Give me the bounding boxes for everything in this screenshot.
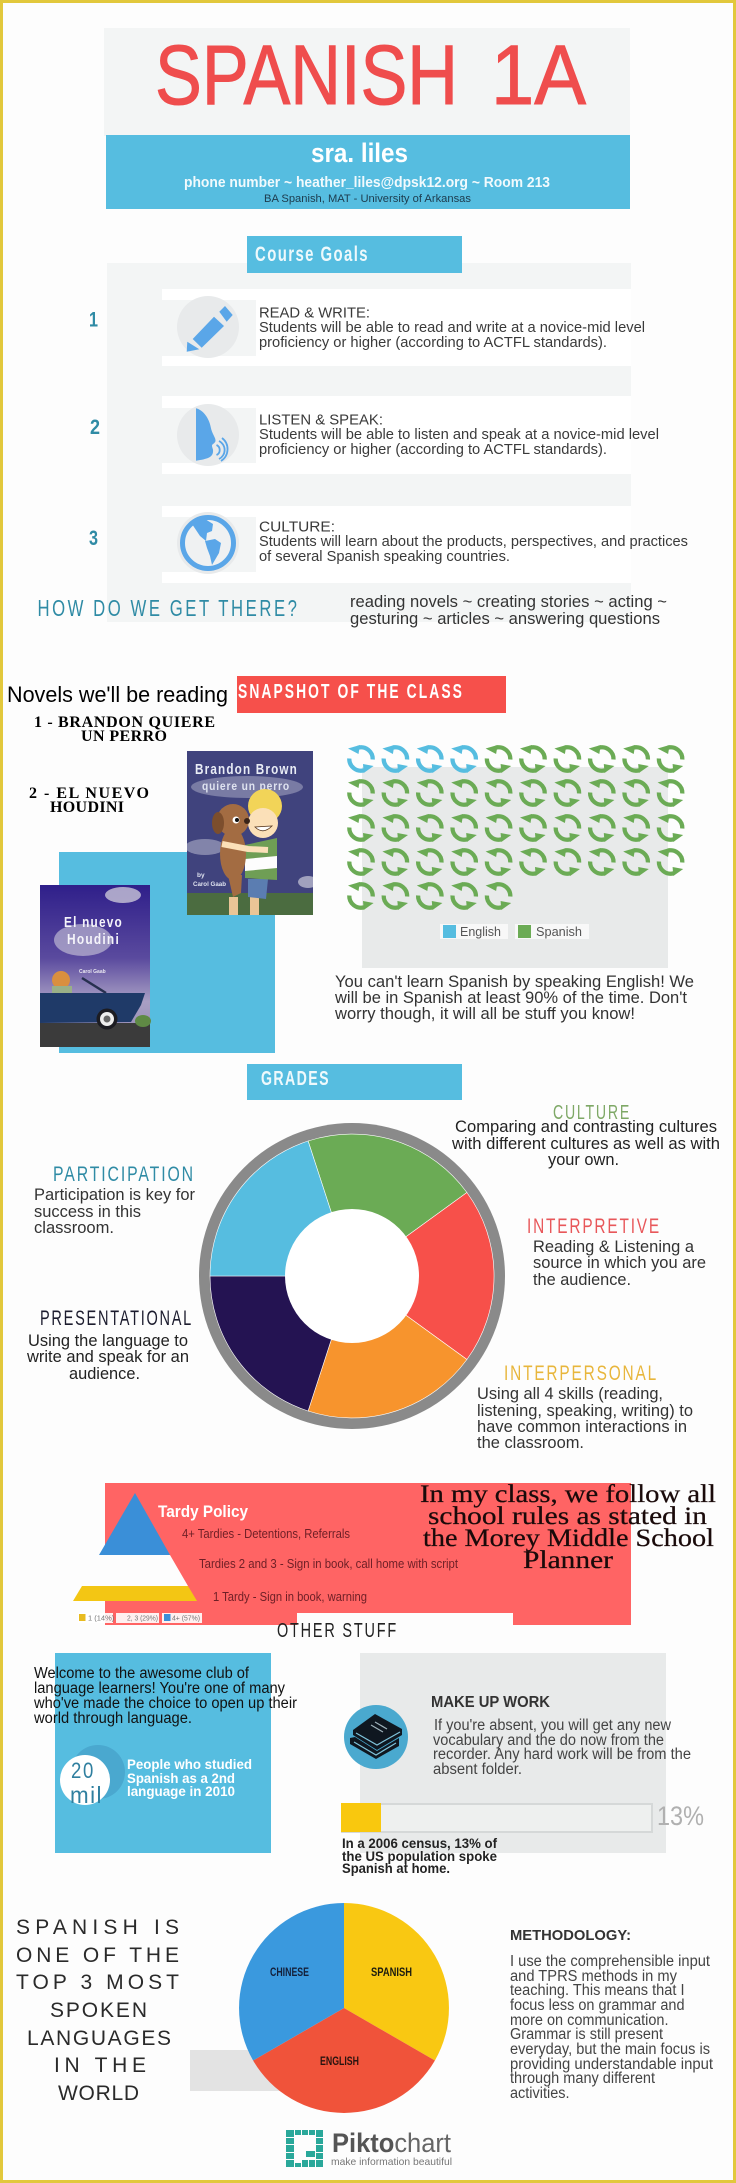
text: school rules: school rules as stated in	[428, 1503, 708, 1530]
text: presentational	[26, 1307, 193, 1383]
text: census	[342, 1836, 497, 1876]
text: methodology: activities.	[510, 2085, 570, 2102]
pyramid legend	[78, 1613, 202, 1623]
text: methodology: and TPRS methods in my	[510, 1968, 677, 1985]
text: welcome	[33, 1665, 297, 1727]
donut chart: grades	[199, 1123, 505, 1429]
text: participation: Participation is key for	[34, 1185, 195, 1204]
book cover: El nuevo Houdini	[40, 885, 151, 1047]
goal 3: culture: 3	[89, 527, 98, 550]
text: interpersonal: INTERPERSONAL	[504, 1362, 658, 1385]
goal 3: culture: Students will learn about the products, perspectives, and practices	[259, 534, 688, 550]
novel titles: UN PERRO	[81, 728, 167, 745]
text: school rules: In my class, we follow all	[420, 1481, 716, 1508]
text: census: In a 2006 census, 13% of	[342, 1836, 497, 1851]
goal 3: culture: CULTURE:	[259, 520, 335, 536]
text: interpretive	[527, 1215, 706, 1289]
pictogram: Spanish	[348, 745, 683, 910]
text: census: the US population spoke	[342, 1849, 497, 1864]
text: interpersonal: have common interactions in	[477, 1417, 687, 1436]
text: interpretive: the audience.	[533, 1270, 631, 1289]
text: school rules	[420, 1481, 716, 1574]
pictogram: English	[348, 745, 477, 773]
icon: logo grid	[286, 2130, 323, 2167]
text: welcome: world through language.	[33, 1710, 192, 1727]
panel: make up work: If you're absent, you will get any new	[434, 1717, 672, 1734]
panel: course goals	[89, 236, 688, 622]
goal 1: read and write: proficiency or higher (according to ACTFL standards).	[259, 335, 607, 351]
panel: tardy policy: Tardies 2 and 3 - Sign in book, call home with script	[199, 1557, 458, 1571]
goal 3: culture	[89, 506, 688, 583]
progress bar: 13%	[341, 1801, 704, 1832]
text: interpersonal	[477, 1362, 693, 1452]
goal 2: listen and speak: LISTEN & SPEAK:	[259, 412, 383, 428]
how do we get there: reading novels ~ creating stories ~ acting ~	[350, 593, 667, 611]
legend	[440, 924, 589, 939]
panel: make up work: recorder. Any hard work will be from the	[433, 1746, 691, 1763]
text: census: Spanish at home.	[342, 1861, 450, 1876]
panel: make up work	[341, 1653, 704, 1876]
teacher info band: BA Spanish, MAT - University of Arkansas	[264, 193, 471, 205]
heading: grades: GRADES	[261, 1068, 330, 1090]
title: SPANISH	[155, 28, 458, 122]
pyramid legend: 2, 3 (29%)	[127, 1614, 158, 1622]
pyramid legend: 1 (14%)	[88, 1614, 115, 1622]
text: culture	[451, 1102, 720, 1169]
title: 1A	[491, 28, 586, 122]
paragraph: speaking Spanish: worry though, it will all be stuff you know!	[334, 1004, 635, 1023]
text: welcome: language learners! You're one of many	[34, 1680, 285, 1697]
text: presentational: write and speak for an	[26, 1347, 189, 1366]
text: welcome: who've made the choice to open up their	[33, 1695, 297, 1712]
stat: 20 mil	[60, 1745, 125, 1808]
text: methodology: METHODOLOGY:	[510, 1927, 631, 1944]
text: top 3 most spoken languages: IN THE	[54, 2054, 146, 2077]
panel: tardy policy: Tardy Policy	[158, 1502, 248, 1521]
heading: grades	[247, 1064, 462, 1100]
text: interpretive: INTERPRETIVE	[527, 1215, 661, 1238]
goal 1: read and write: 1	[89, 308, 98, 332]
book cover: Brandon Brown quiere un perro: quiere un perro	[202, 779, 290, 793]
text: top 3 most spoken languages: TOP 3 MOST	[16, 1971, 179, 1994]
paragraph: speaking Spanish	[334, 972, 694, 1023]
legend: English	[460, 924, 501, 939]
text: top 3 most spoken languages: SPANISH IS	[16, 1916, 179, 1939]
teacher info band: sra. liles	[311, 138, 408, 168]
text: top 3 most spoken languages: ONE OF THE	[16, 1944, 179, 1967]
text: interpretive: source in which you are	[533, 1253, 706, 1272]
book cover: El nuevo Houdini: Houdini	[67, 932, 120, 948]
text: presentational: Using the language to	[28, 1331, 188, 1350]
text: top 3 most spoken languages: WORLD	[58, 2082, 139, 2105]
text: culture: your own.	[548, 1150, 619, 1169]
goal 2: listen and speak	[90, 396, 659, 474]
icon: pencil	[177, 296, 239, 358]
Piktochart logo	[286, 2128, 452, 2168]
book cover: Brandon Brown quiere un perro: by	[197, 872, 205, 879]
text: methodology: teaching. This means that I	[510, 1982, 684, 1999]
text: interpretive: Reading & Listening a	[533, 1237, 695, 1256]
novel titles	[29, 714, 215, 816]
pyramid chart	[60, 1493, 197, 1601]
heading: snapshot of the class: SNAPSHOT OF THE CLASS	[238, 681, 464, 703]
text: participation: success in this	[34, 1202, 141, 1221]
heading: course goals	[247, 236, 462, 273]
text: participation: classroom.	[34, 1218, 114, 1237]
teacher info band	[106, 135, 630, 209]
panel: make up work: MAKE UP WORK	[431, 1694, 551, 1711]
panel: language learners: language in 2010	[127, 1783, 235, 1799]
text: presentational: PRESENTATIONAL	[40, 1307, 193, 1330]
goal 2: listen and speak: proficiency or higher (according to ACTFL standards).	[259, 442, 607, 458]
panel: language learners: People who studied	[127, 1756, 252, 1772]
text: welcome: Welcome to the awesome club of	[34, 1665, 250, 1682]
goal 1: read and write	[89, 289, 645, 366]
book cover: El nuevo Houdini: Carol Gaab	[79, 969, 106, 975]
heading: course goals: Course Goals	[255, 243, 369, 266]
goal 2: listen and speak: 2	[90, 416, 100, 439]
heading: snapshot of the class	[237, 676, 506, 713]
text: top 3 most spoken languages: LANGUAGES	[27, 2027, 171, 2050]
text: top 3 most spoken languages	[16, 1916, 179, 2105]
novels heading: Novels we'll be reading	[7, 682, 228, 707]
book cover: El nuevo Houdini: El nuevo	[64, 915, 123, 931]
icon: speaking head	[177, 404, 239, 466]
text: methodology: more on communication.	[510, 2012, 668, 2029]
paragraph: speaking Spanish: will be in Spanish at least 90% of the time. Don't	[334, 988, 687, 1007]
icon: globe	[177, 512, 239, 574]
icon: books	[344, 1705, 408, 1769]
Piktochart logo: make information beautiful	[331, 2156, 452, 2168]
text: presentational: audience.	[69, 1364, 140, 1383]
panel: language learners: Spanish as a 2nd	[127, 1770, 235, 1786]
text: participation	[34, 1163, 195, 1237]
pie chart: languages	[239, 1903, 449, 2113]
text: top 3 most spoken languages: SPOKEN	[50, 1999, 147, 2022]
text: methodology: I use the comprehensible input	[510, 1953, 711, 1970]
text: culture: Comparing and contrasting cultures	[455, 1117, 717, 1136]
how do we get there: gesturing ~ articles ~ answering questions	[350, 610, 660, 628]
text: participation: PARTICIPATION	[53, 1163, 195, 1186]
text: methodology: providing understandable input	[510, 2056, 714, 2073]
text: methodology: focus less on grammar and	[510, 1997, 684, 2014]
stat: 20 mil: 20	[71, 1758, 95, 1783]
heading: other stuff: OTHER STUFF	[277, 1620, 398, 1642]
novel titles: 1 - BRANDON QUIERE	[34, 714, 215, 731]
text: culture: with different cultures as well as with	[451, 1134, 720, 1153]
paragraph: speaking Spanish: You can't learn Spanish by speaking English! We	[335, 972, 694, 991]
book cover: Brandon Brown quiere un perro	[185, 751, 318, 915]
panel: tardy policy: 4+ Tardies - Detentions, Referrals	[182, 1527, 350, 1541]
how do we get there	[38, 593, 667, 628]
text: methodology: everyday, but the main focus is	[510, 2041, 710, 2058]
pyramid legend: 4+ (57%)	[172, 1614, 200, 1622]
book cover: Brandon Brown quiere un perro: Brandon Brown	[195, 761, 298, 778]
panel: make up work: vocabulary and the do now from the	[433, 1732, 664, 1749]
pie chart: languages: CHINESE	[270, 1965, 309, 1979]
text: methodology	[510, 1927, 714, 2102]
header	[104, 28, 630, 209]
text: school rules: the Morey Middle School	[423, 1525, 714, 1552]
goal 1: read and write: Students will be able to read and write at a novice-mid level	[259, 320, 645, 336]
panel: pictogram chart	[348, 745, 683, 968]
panel: tardy policy: 1 Tardy - Sign in book, warning	[213, 1590, 367, 1604]
goal 3: culture: of several Spanish speaking countries.	[259, 549, 510, 565]
stat: 20 mil: mil	[70, 1782, 103, 1808]
text: interpersonal: listening, speaking, writing) to	[477, 1401, 693, 1420]
Piktochart logo: Piktochart	[332, 2128, 451, 2158]
text: methodology: Grammar is still present	[510, 2026, 664, 2043]
text: interpersonal: the classroom.	[477, 1433, 584, 1452]
text: methodology: through many different	[510, 2070, 656, 2087]
gray bar behind pie	[190, 2050, 282, 2091]
goal 2: listen and speak: Students will be able to listen and speak at a novice-mid level	[259, 427, 659, 443]
text: school rules: Planner	[523, 1547, 614, 1574]
pie chart: languages: SPANISH	[371, 1965, 412, 1979]
panel: language learners	[55, 1653, 271, 1853]
panel: tardy policy	[60, 1483, 631, 1625]
legend: Spanish	[536, 924, 582, 939]
novel titles: HOUDINI	[50, 799, 124, 816]
novel titles: 2 - EL NUEVO	[29, 785, 149, 802]
pie chart: languages: ENGLISH	[320, 2054, 359, 2068]
text: culture: CULTURE	[553, 1102, 631, 1124]
book cover: Brandon Brown quiere un perro: Carol Gaab	[193, 881, 226, 888]
how do we get there: HOW DO WE GET THERE?	[38, 595, 300, 621]
panel: make up work: absent folder.	[433, 1761, 522, 1778]
teacher info band: phone number ~ heather_liles@dpsk12.org ~ Room 213	[184, 175, 550, 191]
progress bar: 13%: 13%	[657, 1801, 704, 1831]
text: interpersonal: Using all 4 skills (reading,	[477, 1384, 663, 1403]
blue panel behind books	[59, 852, 275, 1053]
goal 1: read and write: READ & WRITE:	[259, 306, 370, 322]
